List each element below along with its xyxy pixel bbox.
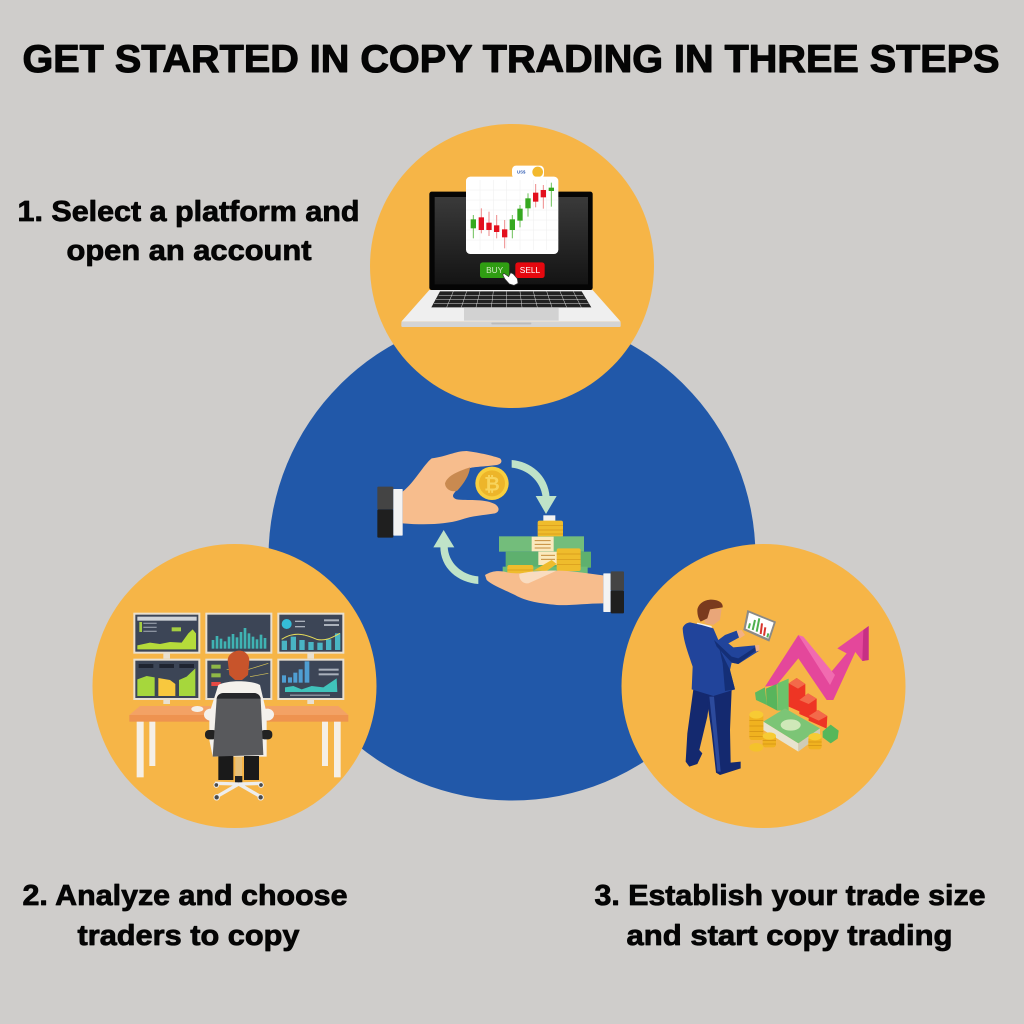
title: GET STARTED IN COPY TRADING IN THREE STEPS xyxy=(22,38,1000,81)
step 1 label: 1. Select a platform and xyxy=(18,196,360,228)
icon: laptop with trading chart: BUY xyxy=(486,265,504,275)
bar chart blocks xyxy=(755,678,839,743)
businessman xyxy=(683,600,759,775)
panel: step 2 orange circle xyxy=(92,544,376,828)
central blue circle xyxy=(268,314,756,800)
step 2 label: 2. Analyze and choose xyxy=(22,880,348,912)
step 1 label xyxy=(18,196,360,267)
step 2 label xyxy=(22,880,348,952)
lower hand holding money xyxy=(485,571,624,613)
step 3 label: 3. Establish your trade size xyxy=(594,880,986,912)
icon: laptop with trading chart: SELL xyxy=(520,265,541,275)
step 2 label: traders to copy xyxy=(78,920,300,952)
pink rising arrow xyxy=(765,626,869,700)
upper hand holding coin xyxy=(377,451,509,538)
icon: trader at desk with six monitors xyxy=(129,614,348,800)
panel: step 1 orange circle xyxy=(370,124,654,408)
icon: laptop with trading chart: US$ xyxy=(517,170,526,175)
stack of cash and coins xyxy=(499,515,591,583)
step 1 label: open an account xyxy=(66,235,312,267)
trader in office chair xyxy=(204,651,274,800)
arrow: to money xyxy=(512,460,557,514)
icon: businessman with rising chart and money xyxy=(683,600,869,775)
upper hand holding coin: ₿ xyxy=(484,473,500,496)
step 3 label: and start copy trading xyxy=(626,920,952,952)
tablet with bar chart xyxy=(743,610,776,642)
step 3 label xyxy=(594,880,986,952)
arrow: to coin xyxy=(433,530,478,584)
panel: step 3 orange circle xyxy=(622,544,906,828)
gold coin stacks xyxy=(749,711,822,752)
desk xyxy=(129,706,348,777)
banknote stack xyxy=(763,708,820,752)
icon: laptop with trading chart xyxy=(401,166,621,327)
icon: hands exchanging bitcoin and money xyxy=(377,451,624,613)
monitor wall xyxy=(134,614,343,704)
